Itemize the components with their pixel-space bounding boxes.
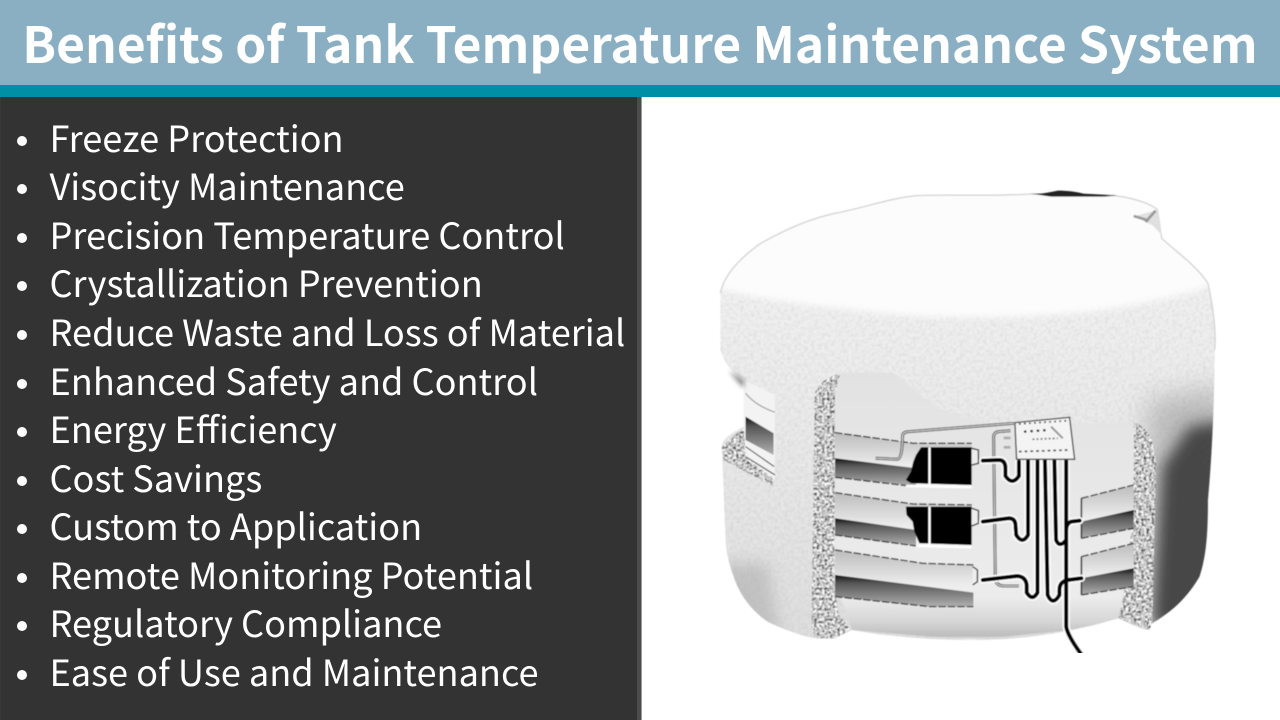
heater band 1	[835, 433, 978, 487]
bullet: freeze protection: Freeze Protection	[50, 111, 344, 163]
tank lid top	[723, 194, 1207, 319]
title: Benefits of Tank Temperature Maintenance System	[22, 6, 1258, 78]
bullet: custom to application: Custom to Application	[50, 499, 422, 551]
grey thermostat conduit	[876, 423, 1019, 586]
heater band 4	[1081, 485, 1134, 538]
tank outline edge	[720, 194, 1215, 350]
bullet: viscosity maintenance: Visocity Maintenance	[50, 159, 405, 211]
bullet: regulatory compliance: Regulatory Compliance	[50, 596, 442, 648]
bullet: cost savings: Cost Savings	[50, 451, 262, 503]
heater band 2	[835, 493, 978, 547]
teal divider bar	[0, 85, 1280, 97]
left foam cut edge	[811, 374, 850, 638]
illustration: insulated tank cutaway	[720, 190, 1216, 653]
lid corner fold	[1134, 210, 1162, 235]
bullet: crystallization prevention: Crystallization Prevention	[50, 256, 483, 308]
left foam insulation piece	[722, 427, 775, 486]
bullet: energy efficiency: Energy Efficiency	[50, 402, 337, 454]
bullet: safety and control: Enhanced Safety and Control	[50, 354, 538, 406]
left side window	[729, 371, 775, 485]
panel: benefits list	[0, 97, 642, 720]
cutaway window showing tank wall	[835, 373, 1139, 640]
control box	[1004, 417, 1075, 459]
right foam cut edge	[1118, 422, 1156, 630]
black heater wiring	[983, 459, 1083, 657]
heater band 3	[835, 550, 977, 607]
tank top nozzle cap	[1029, 191, 1117, 197]
header band	[0, 0, 1280, 85]
bullet: remote monitoring: Remote Monitoring Potential	[50, 548, 533, 600]
bullet: ease of use: Ease of Use and Maintenance	[50, 645, 539, 697]
tank fleece jacket body	[714, 180, 1226, 647]
bullet: precision temperature control: Precision Temperature Control	[50, 208, 565, 260]
bullet: reduce waste: Reduce Waste and Loss of Material	[50, 305, 625, 357]
heater band 5	[1081, 543, 1134, 595]
